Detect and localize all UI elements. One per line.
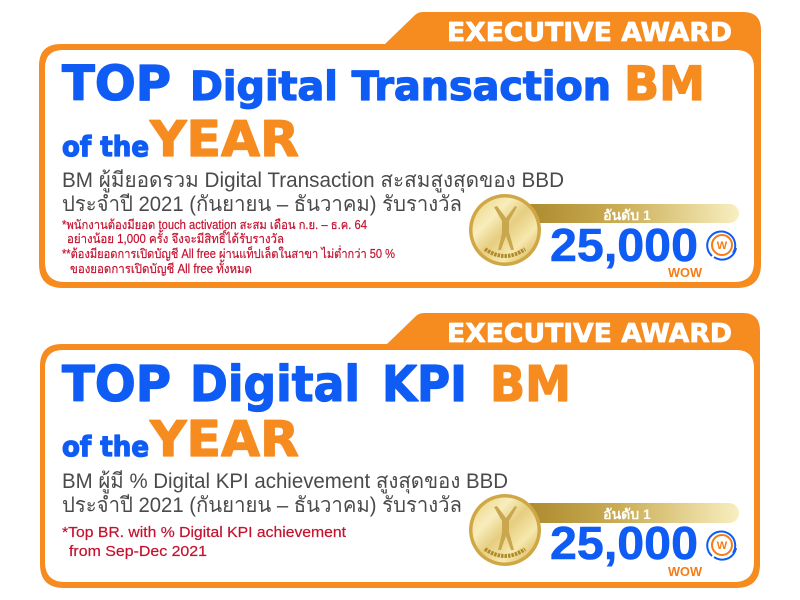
card white interior: [45, 50, 754, 282]
rank ribbon: อันดับ 1: [603, 506, 651, 522]
conditions: ของยอดการเปิดบัญชี All free ทั้งหมด: [70, 259, 252, 276]
rank ribbon: [515, 503, 739, 523]
panel: Top Digital Transaction BM award card: [39, 12, 761, 288]
conditions: *พนักงานต้องมียอด touch activation สะสม เดือน ก.ย. – ธ.ค. 64: [62, 218, 367, 232]
rank ribbon: อันดับ 1: [603, 207, 651, 223]
title: of the YEAR: [62, 411, 299, 468]
title: of the YEAR: YEAR: [149, 411, 299, 468]
title: TOP Digital KPI BM: TOP: [62, 356, 171, 413]
title: TOP Digital Transaction BM: Digital Transaction: [190, 64, 611, 110]
description: BM ผู้มี % Digital KPI achievement สูงสุดของ BBD: [62, 470, 508, 494]
description: BM ผู้มียอดรวม Digital Transaction สะสมสูงสุดของ BBD: [62, 169, 564, 193]
rank ribbon: [515, 204, 739, 223]
conditions: [62, 218, 395, 276]
icon: gold medal: [469, 494, 541, 566]
icon: WOW coin: W: [717, 240, 728, 252]
tab label: EXECUTIVE AWARD: [447, 319, 732, 349]
title: TOP Digital Transaction BM: TOP: [62, 56, 171, 112]
title: of the YEAR: of the: [62, 430, 149, 463]
icon: WOW coin: W: [717, 540, 728, 552]
prize amount: 25,000: [550, 219, 698, 271]
title: TOP Digital KPI BM: KPI: [382, 356, 467, 413]
description: ประจำปี 2021 (กันยายน – ธันวาคม) รับรางวัล: [62, 494, 462, 517]
icon: gold medal: [469, 194, 541, 266]
title: TOP Digital KPI BM: BM: [490, 356, 571, 413]
card frame with tab: [40, 313, 760, 588]
title: of the YEAR: YEAR: [149, 111, 299, 168]
tab label: EXECUTIVE AWARD: [447, 18, 732, 48]
title: of the YEAR: [62, 111, 299, 168]
conditions: *Top BR. with % Digital KPI achievement: [62, 524, 347, 541]
icon: WOW coin: [707, 531, 736, 560]
card frame with tab: [39, 12, 761, 288]
title: TOP Digital Transaction BM: BM: [624, 57, 705, 112]
title: TOP Digital KPI BM: Digital: [190, 356, 360, 413]
description: [62, 470, 508, 517]
title: TOP Digital Transaction BM: [62, 56, 705, 112]
card white interior: [45, 350, 754, 582]
prize amount: 25,000: [550, 517, 698, 569]
description: [62, 169, 564, 216]
description: ประจำปี 2021 (กันยายน – ธันวาคม) รับรางวัล: [62, 193, 462, 216]
title: of the YEAR: of the: [62, 130, 149, 163]
icon: WOW coin: [707, 231, 736, 260]
conditions: from Sep-Dec 2021: [69, 543, 207, 560]
conditions: อย่างน้อย 1,000 ครั้ง จึงจะมีสิทธิ์ได้รับรางวัล: [67, 229, 284, 246]
panel: Top Digital KPI BM award card: [40, 313, 760, 588]
conditions: **ต้องมียอดการเปิดบัญชี All free ผ่านแท็ปเล็ตในสาขา ไม่ต่ำกว่า 50 %: [62, 245, 395, 261]
WOW unit label: WOW: [668, 265, 703, 280]
WOW unit label: WOW: [668, 564, 703, 579]
conditions: [62, 524, 347, 560]
title: TOP Digital KPI BM: [62, 356, 571, 413]
